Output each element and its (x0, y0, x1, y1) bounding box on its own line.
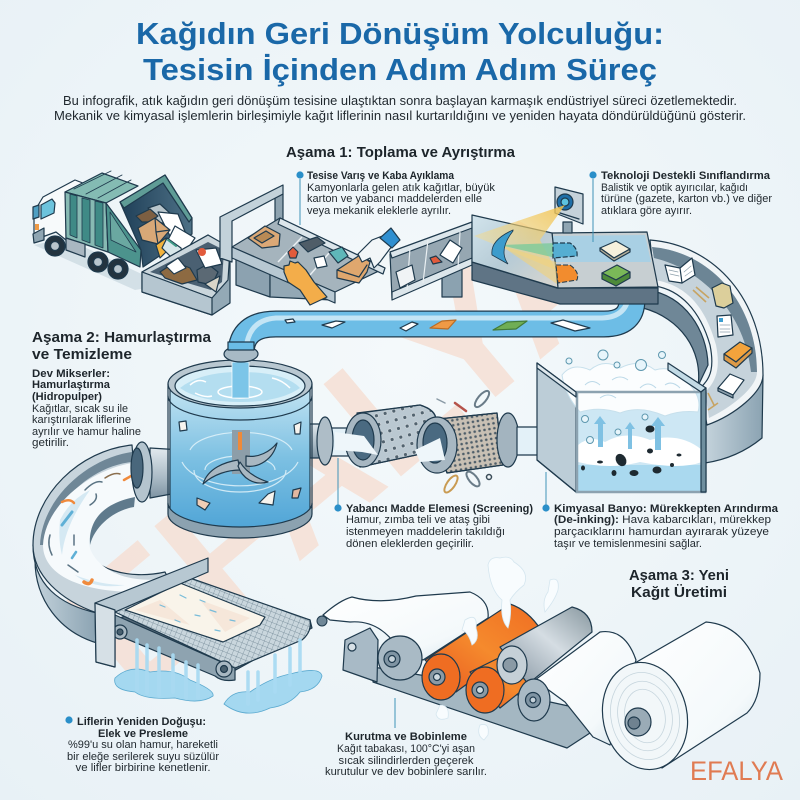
optical sorter (472, 187, 658, 304)
heading: stage 3: Kağıt Üretimi (631, 584, 727, 601)
water puddles (115, 669, 213, 701)
channel flange (131, 442, 182, 502)
callout: drying: kurutulur ve dev bobinlere sarılır. (325, 766, 487, 778)
channel inner wall (90, 497, 135, 545)
hydropulper text: (Hidropulper) (32, 391, 102, 403)
sorting conveyor with gate (220, 185, 400, 305)
callout: screening: Hamur, zımba teli ve ataş gibi (346, 514, 490, 526)
roller 4 (518, 679, 550, 721)
rollers (113, 625, 232, 677)
tank body (168, 360, 312, 538)
truck (33, 171, 195, 290)
orange hand (284, 261, 327, 305)
intro text (54, 94, 746, 123)
white foam bottom (578, 435, 702, 466)
callout: screening: istenmeyen maddelerin takıldığı (346, 526, 505, 538)
heading: stage 3 (629, 567, 729, 601)
pipe flange (224, 342, 258, 362)
heading: stage 1: Aşama 1: Toplama ve Ayrıştırma (286, 144, 516, 161)
channel rim (33, 445, 170, 613)
callout: screening: dönen eleklerden geçirilir. (346, 538, 474, 550)
sorted orange stream (556, 265, 578, 283)
bubbles (566, 350, 666, 444)
pulp debris (49, 474, 131, 584)
callout: screening: Yabancı Madde Elemesi (Screening) (346, 503, 533, 515)
title (136, 16, 664, 87)
connector left (317, 417, 362, 465)
camera (555, 187, 583, 233)
curved conveyor (643, 240, 763, 463)
callout: fibers reborn: Elek ve Presleme (98, 728, 188, 740)
front frame (537, 363, 706, 492)
screening drums (317, 389, 562, 494)
cardboard box (248, 226, 280, 248)
tank outlet pipe (310, 424, 330, 458)
steam (436, 557, 558, 740)
hydropulper text (32, 368, 141, 449)
callout: technology: Teknoloji Destekli Sınıflandırma (601, 170, 771, 182)
gloved hand (358, 228, 400, 268)
main pipe (241, 290, 632, 354)
hopper (120, 175, 192, 267)
hydropulper text: Hamurlaştırma (32, 379, 111, 391)
logo: EFALYA (690, 756, 783, 786)
tank side frame (168, 396, 312, 505)
callout: de-inking: parçacıklarını hamurdan ayırarak yüzeye (554, 526, 769, 538)
tank foam (180, 372, 300, 402)
left wall (537, 363, 576, 492)
upper sorting conveyor (390, 222, 472, 300)
callout: arrival: veya mekanik eleklerle ayrılır. (307, 205, 451, 217)
orange roller 1 (422, 604, 541, 700)
water streams (137, 640, 300, 704)
title: Kağıdın Geri Dönüşüm Yolculuğu: (136, 16, 664, 51)
crumpled paper (712, 283, 733, 308)
hydropulper text: getirilir. (32, 437, 69, 449)
orange roller 2 (466, 650, 535, 713)
scanner beam (474, 205, 565, 270)
callout: technology: atıklara göre ayırır. (601, 205, 692, 217)
white paper stack (718, 374, 744, 398)
callout: fibers reborn: bir eleğe serilerek suyu süzülür (67, 751, 219, 763)
pulp flow (43, 463, 165, 592)
document (717, 315, 733, 337)
conveyor outer wall (705, 375, 763, 463)
callout: de-inking: taşır ve temislenmesini sağlar. (554, 538, 702, 550)
heading: stage 2: ve Temizleme (32, 346, 132, 363)
left bracket (343, 628, 378, 682)
paper sheet 1 (323, 592, 488, 660)
callout: arrival: Kamyonlarla gelen atık kağıtlar, büyük (307, 182, 495, 194)
intro text: Bu infografik, atık kağıdın geri dönüşüm tesisine ulaştıktan sonra başlayan karmaşık endüstriyel süreci özetlemektedir. (63, 94, 737, 108)
sorted blue stream (553, 243, 577, 258)
channel outer wall (33, 545, 97, 643)
belt surface (650, 240, 763, 425)
frame (95, 558, 208, 667)
ink particles (581, 426, 682, 476)
sorter base (472, 262, 658, 304)
callout: technology: Balistik ve optik ayırıcılar, kağıdı (601, 182, 748, 194)
chassis block (66, 238, 85, 257)
paper scraps (179, 421, 301, 510)
watermark: EFALYA (34, 162, 657, 729)
callout: fibers reborn: Liflerin Yeniden Doğuşu: (77, 716, 206, 728)
callout: de-inking (542, 503, 779, 550)
gray roller (497, 607, 592, 684)
leader lines (300, 179, 593, 728)
hydropulper text: ayrılır ve hamur haline (32, 426, 141, 438)
screen conveyor (95, 558, 322, 713)
bath liquid (576, 392, 706, 492)
callout: arrival (296, 170, 495, 217)
waste in bin (160, 248, 222, 292)
title: Tesisin İçinden Adım Adım Süreç (143, 52, 657, 87)
gate frame (275, 194, 283, 226)
right panel (668, 363, 706, 392)
tank rim (168, 384, 312, 420)
floating papers in pipe (285, 319, 590, 331)
de-inking tank (537, 350, 706, 492)
heading: stage 2 (32, 329, 212, 363)
mesh belt (115, 578, 310, 668)
sensor arc (492, 230, 513, 264)
open book (665, 258, 695, 283)
callout: drying: Kağıt tabakası, 100°C'yi aşan (337, 743, 475, 755)
callout: arrival: Tesise Varış ve Kaba Ayıklama (307, 170, 455, 182)
hydropulper text: Dev Mikserler: (32, 368, 110, 380)
callout: de-inking: (De-inking): Hava kabarcıkları, mürekkep (554, 514, 771, 526)
waste bin (142, 235, 230, 315)
callout: fibers reborn (65, 716, 219, 774)
green stack (602, 265, 630, 286)
brown streaks (693, 287, 718, 410)
mixer blades (203, 443, 277, 484)
finished paper roll (593, 622, 760, 778)
callout: fibers reborn: %99'u su olan hamur, hareketli (68, 739, 218, 751)
callout: fibers reborn: ve lifler birbirine kenetlenir. (76, 762, 210, 774)
callout: drying: Kurutma ve Bobinleme (345, 731, 467, 743)
shaft (232, 430, 250, 474)
foam top (562, 363, 699, 416)
belt lower body (115, 590, 312, 672)
belt (232, 218, 385, 292)
swirl (182, 432, 298, 492)
callout: technology: türüne (gazete, karton vb.) ve diğer (601, 193, 772, 205)
newspaper stack (600, 241, 630, 261)
callout: arrival: karton ve yabancı maddelerden elle (307, 193, 482, 205)
curved pulp channel (33, 442, 182, 643)
pulper tank (168, 342, 330, 538)
hydropulper text: karıştırılarak liflerine (32, 414, 131, 426)
roller 1 (378, 636, 422, 680)
heading: stage 3: Aşama 3: Yeni (629, 567, 729, 584)
ribbed body (65, 171, 141, 267)
callout: technology (589, 170, 772, 217)
pulp flow (335, 432, 445, 462)
rear panel (106, 203, 141, 267)
heading: stage 2: Aşama 2: Hamurlaştırma (32, 329, 212, 346)
large carton (337, 255, 370, 283)
paper clips and staples (437, 389, 492, 494)
callout: drying: sıcak silindirlerden geçerek (338, 755, 474, 767)
cab (33, 180, 88, 243)
up arrows (594, 416, 665, 450)
conveyor inner wall (643, 290, 708, 386)
machine base (373, 667, 590, 748)
drum 2 (417, 413, 519, 473)
items on belt (288, 237, 348, 268)
intro text: Mekanik ve kimyasal işlemlerin birleşimiyle kağıt liflerinin nasıl kurtarıldığını ve yeniden hayata döndürüldüğünü gösterir. (54, 109, 746, 123)
wheels (45, 236, 128, 279)
orange paper stack (724, 342, 752, 368)
falling waste (136, 204, 195, 260)
callout: de-inking: Kimyasal Banyo: Mürekkepten Arındırma (554, 503, 779, 515)
falling water (232, 362, 249, 398)
paper sheet 2 (535, 632, 636, 745)
pulp sheet (125, 583, 265, 642)
drying rollers (317, 557, 760, 778)
drum 1 (345, 405, 436, 467)
legs (236, 258, 270, 297)
connector right (517, 420, 562, 460)
callout: screening (334, 503, 533, 550)
truck shadow (34, 238, 165, 290)
callout: drying (325, 731, 487, 778)
hydropulper text: Kağıtlar, sıcak su ile (32, 403, 128, 415)
